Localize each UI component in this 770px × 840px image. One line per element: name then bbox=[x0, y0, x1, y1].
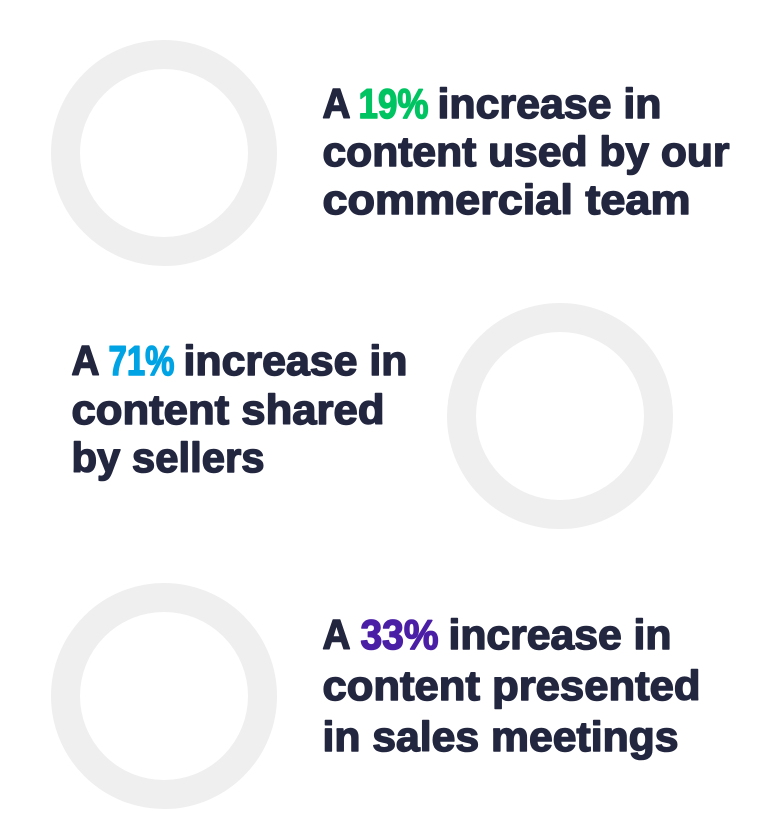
text block: 71% increase: content shared bbox=[72, 386, 384, 433]
text block: 33% increase: A bbox=[322, 611, 350, 658]
text block: 71% increase: A bbox=[72, 337, 100, 384]
text block: 71% increase bbox=[72, 337, 408, 481]
text block: 19% increase: A bbox=[322, 80, 350, 127]
text block: 19% increase: content used by our bbox=[322, 128, 730, 175]
text block: 33% increase: in sales meetings bbox=[322, 713, 678, 760]
text block: 33% increase: 33% bbox=[360, 611, 438, 658]
text block: 71% increase: 71% bbox=[108, 337, 174, 384]
text block: 71% increase: by sellers bbox=[72, 434, 264, 481]
text block: 19% increase: increase in bbox=[438, 80, 662, 127]
text block: 33% increase: content presented bbox=[322, 662, 700, 709]
text block: 33% increase bbox=[322, 611, 700, 760]
ring: sales meetings stat bbox=[66, 598, 262, 794]
text block: 19% increase bbox=[322, 80, 730, 223]
text block: 33% increase: increase in bbox=[448, 611, 672, 658]
text block: 19% increase: commercial team bbox=[322, 176, 690, 223]
ring: commercial team stat bbox=[66, 54, 262, 252]
text block: 71% increase: increase in bbox=[184, 337, 408, 384]
text block: 19% increase: 19% bbox=[358, 80, 428, 127]
ring: sellers stat bbox=[462, 318, 658, 514]
